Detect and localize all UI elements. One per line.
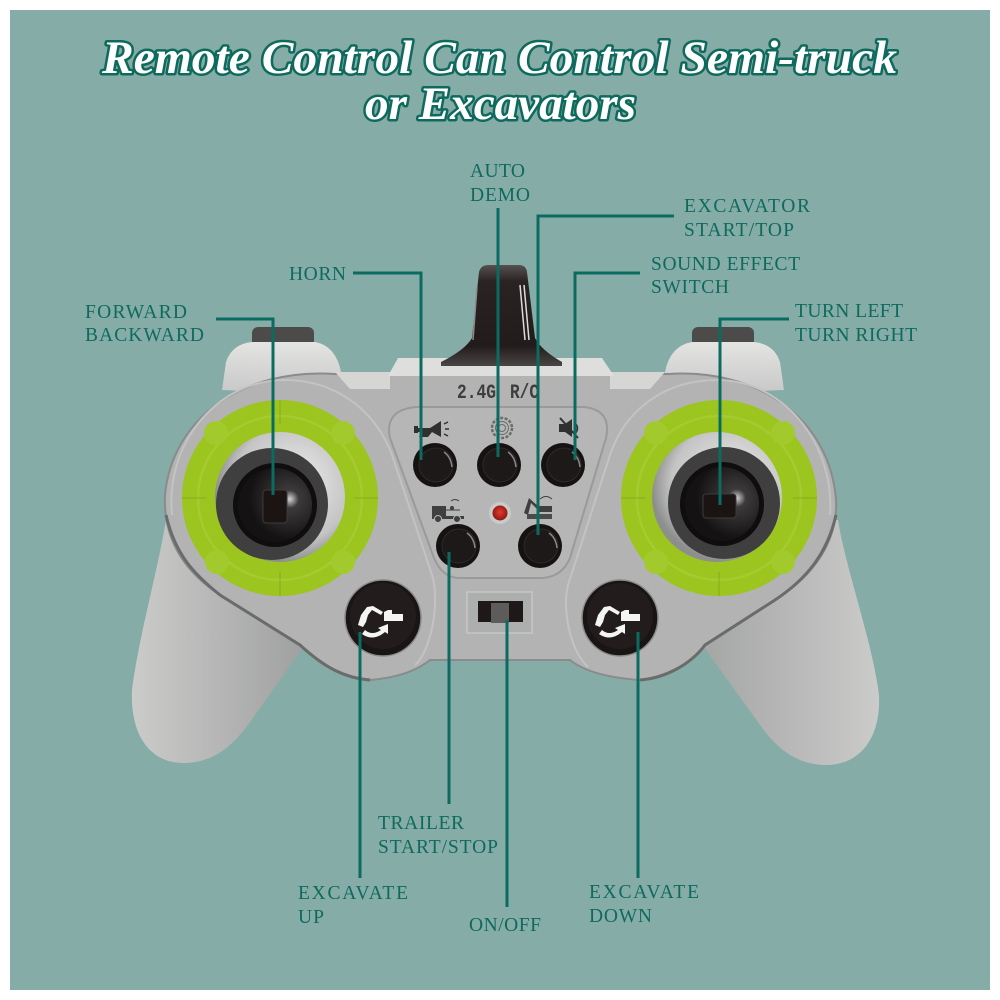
label: auto demo: AUTO bbox=[470, 161, 525, 182]
green ring bbox=[621, 400, 817, 596]
icon: gear bbox=[492, 418, 512, 438]
icon: excavator bbox=[524, 496, 552, 519]
label: excavate up bbox=[298, 883, 408, 928]
label: auto demo bbox=[470, 161, 530, 206]
green ring bbox=[182, 400, 378, 596]
label: 2.4G R/C: R/C bbox=[510, 382, 539, 405]
label: sound effect switch bbox=[651, 254, 800, 298]
main body bbox=[165, 374, 836, 680]
round buttons bbox=[413, 443, 585, 568]
label: on/off: ON/OFF bbox=[469, 915, 541, 936]
left thumb pad rim bbox=[171, 380, 435, 665]
right thumb pad rim bbox=[566, 380, 830, 667]
title: Remote Control Can Control Semi-truck bbox=[101, 32, 897, 84]
side bevel strips bbox=[335, 372, 665, 389]
label: excavator start/top: EXCAVATOR bbox=[684, 196, 810, 217]
game controller bbox=[132, 265, 879, 765]
icon: muted speaker bbox=[559, 418, 578, 438]
left excavator button bbox=[345, 580, 421, 656]
label: excavate down: EXCAVATE bbox=[589, 882, 699, 903]
label: turn left turn right: TURN RIGHT bbox=[795, 325, 917, 346]
shoulder buttons bbox=[252, 327, 754, 351]
label: auto demo: DEMO bbox=[470, 185, 530, 206]
top centre housing bbox=[390, 358, 612, 395]
right grip bbox=[695, 520, 879, 765]
labels bbox=[85, 161, 917, 936]
label: excavator start/top bbox=[684, 196, 810, 241]
label: trailer start/stop: TRAILER bbox=[378, 813, 464, 834]
leader lines bbox=[216, 208, 789, 907]
red LED bbox=[489, 502, 511, 524]
dome bbox=[215, 432, 345, 562]
title: or Excavators bbox=[365, 78, 636, 130]
label: excavator start/top: START/TOP bbox=[684, 220, 794, 241]
label: forward backward bbox=[85, 302, 204, 346]
antenna bbox=[441, 265, 562, 366]
label: forward backward: FORWARD bbox=[85, 302, 187, 323]
left grip bbox=[132, 520, 312, 763]
label: trailer start/stop: START/STOP bbox=[378, 837, 498, 858]
centre housing light band bbox=[388, 358, 614, 376]
title bbox=[101, 32, 897, 130]
dome bbox=[652, 432, 782, 562]
label: turn left turn right bbox=[795, 301, 917, 346]
label: excavate up: UP bbox=[298, 907, 324, 928]
left joystick bbox=[182, 400, 378, 596]
right excavator button bbox=[582, 580, 658, 656]
label: excavate up: EXCAVATE bbox=[298, 883, 408, 904]
on/off switch bbox=[467, 592, 532, 633]
lower-right dark rim bbox=[640, 515, 836, 680]
label: turn left turn right: TURN LEFT bbox=[795, 301, 903, 322]
lower-left dark rim bbox=[166, 515, 370, 680]
icon: truck bbox=[432, 500, 464, 522]
shoulder housings bbox=[222, 342, 784, 395]
right joystick bbox=[621, 400, 817, 596]
label: excavate down: DOWN bbox=[589, 906, 652, 927]
label: excavate down bbox=[589, 882, 699, 927]
label: 2.4G R/C bbox=[457, 382, 539, 405]
label: sound effect switch: SWITCH bbox=[651, 277, 729, 298]
label: sound effect switch: SOUND EFFECT bbox=[651, 254, 800, 275]
icon: horn bbox=[414, 421, 449, 437]
label: horn: HORN bbox=[289, 264, 346, 285]
button panel bbox=[389, 407, 607, 578]
label: 2.4G R/C: 2.4G bbox=[457, 382, 496, 405]
label: forward backward: BACKWARD bbox=[85, 325, 204, 346]
label: trailer start/stop bbox=[378, 813, 498, 858]
